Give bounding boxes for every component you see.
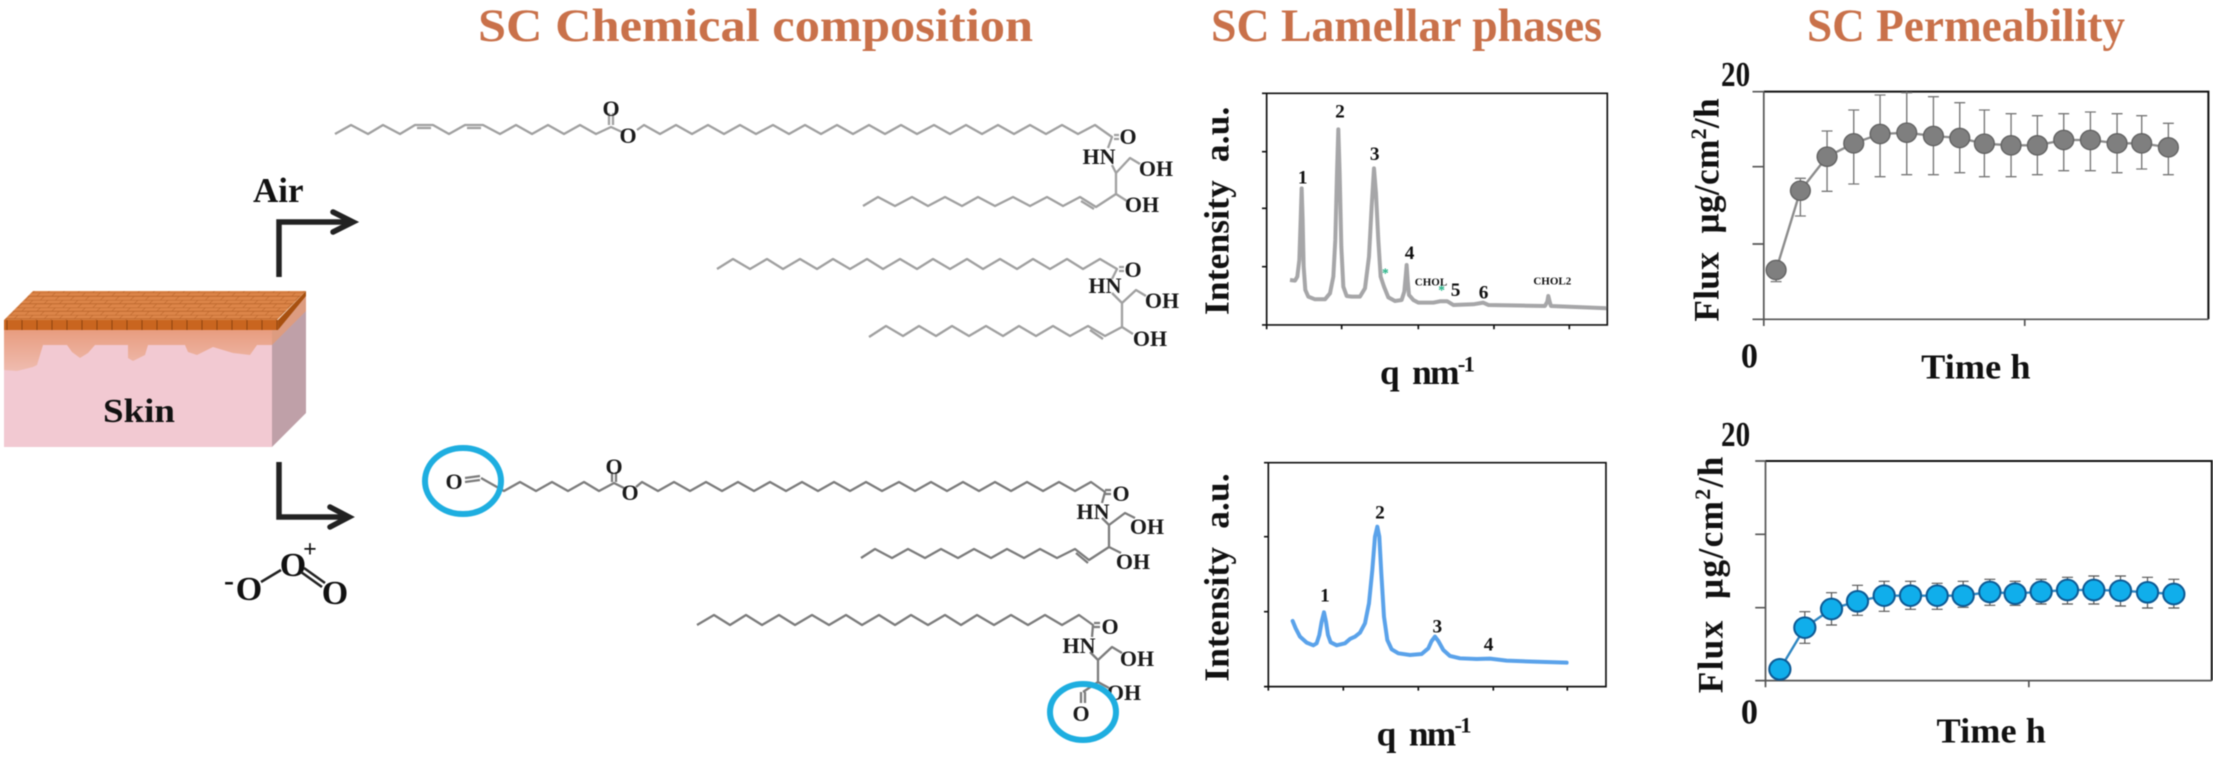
molecule: ozone oxidised ceramide: OH: [1107, 680, 1141, 705]
peak labels: 3: [1432, 616, 1442, 637]
molecule: air ester ceramide EOS: HN: [1082, 144, 1116, 169]
chart axes: [1264, 463, 1606, 691]
molecule: ozone oxidised ester ceramide: [425, 448, 1164, 574]
x axis label: Time h: [1921, 347, 2031, 386]
molecule: air ceramide NS: HN: [1088, 273, 1122, 298]
icon: ozone molecule: +: [303, 537, 317, 563]
y axis label: 2: [1686, 128, 1711, 139]
grey diffraction curve: [1290, 129, 1607, 308]
icon: ozone molecule: O: [322, 575, 348, 612]
peak labels: [1320, 502, 1494, 656]
peak labels: 2: [1375, 502, 1385, 523]
peak labels: *: [1438, 283, 1445, 298]
chart: air SAXS intensity: [1198, 93, 1607, 392]
molecule: air ceramide NS: OH: [1145, 288, 1179, 313]
molecule: ozone oxidised ceramide: [697, 614, 1154, 740]
peak labels: 1: [1298, 167, 1307, 188]
peak labels: [1298, 101, 1572, 304]
blue diffraction curve: [1293, 527, 1567, 663]
title: SC Permeability: SC Permeability: [1807, 0, 2125, 52]
icon: ozone molecule: -: [224, 564, 234, 597]
x axis label: q nm: [1377, 714, 1456, 753]
y axis max: 20: [1721, 414, 1750, 454]
x axis label: -1: [1454, 713, 1472, 738]
label: Air: Air: [253, 171, 304, 210]
data line: [1776, 133, 2168, 270]
y axis label: Intensity a.u.: [1198, 473, 1237, 682]
arrow: ozone: [279, 462, 349, 527]
title: SC Chemical composition: SC Chemical composition: [478, 0, 1033, 52]
peak labels: 3: [1370, 144, 1379, 165]
y axis label: /h: [1686, 98, 1726, 129]
x axis label: q nm: [1380, 353, 1460, 392]
callout: aldehyde circle: [425, 448, 501, 514]
molecule: air ceramide NS: OH: [1133, 326, 1167, 351]
molecule: air ester ceramide EOS: O: [1119, 124, 1137, 149]
molecule: ozone oxidised ceramide: OH: [1120, 646, 1154, 671]
peak labels: 4: [1405, 243, 1415, 264]
data line: [1780, 590, 2174, 669]
peak labels: 4: [1484, 635, 1494, 656]
error bars: [1771, 92, 2174, 282]
y axis label: Flux µg/cm: [1686, 140, 1726, 322]
molecule: ozone oxidised ester ceramide: O: [445, 469, 463, 494]
molecule: ozone oxidised ester ceramide: OH: [1116, 549, 1150, 574]
error bars: [1799, 576, 2179, 643]
chart axes: [1755, 461, 2212, 687]
molecule: ozone oxidised ester ceramide: O: [1112, 481, 1130, 506]
y axis zero: 0: [1741, 692, 1758, 731]
molecule: ozone oxidised ceramide: O: [1101, 614, 1119, 639]
molecule: air ester ceramide EOS: O: [602, 96, 620, 121]
icon: skin block: [4, 291, 306, 447]
peak labels: 2: [1335, 101, 1345, 122]
title: SC Lamellar phases: SC Lamellar phases: [1211, 0, 1602, 52]
chart axes: [1753, 92, 2208, 326]
molecule: ozone oxidised ester ceramide: HN: [1076, 499, 1110, 524]
icon: ozone molecule: [224, 537, 348, 612]
icon: ozone molecule: O: [280, 547, 306, 584]
molecule: ozone oxidised ester ceramide: O: [605, 454, 623, 479]
molecule: ozone oxidised ceramide: O: [1072, 701, 1090, 726]
molecule: ozone oxidised ester ceramide: OH: [1130, 514, 1164, 539]
molecule: air ester ceramide EOS: O: [619, 123, 637, 148]
x axis label: -1: [1458, 351, 1475, 376]
chart: air permeability flux: [1686, 54, 2208, 386]
chart: ozone permeability flux: [1690, 414, 2212, 750]
arrow: air: [279, 212, 353, 277]
peak labels: 1: [1320, 586, 1330, 607]
x axis label: Time h: [1937, 711, 2046, 750]
icon: ozone molecule: O: [236, 571, 262, 608]
y axis max: 20: [1721, 54, 1750, 94]
label: Skin: Skin: [103, 393, 175, 430]
y axis label: Intensity a.u.: [1198, 107, 1237, 315]
molecule: ozone oxidised ester ceramide: O: [621, 480, 639, 505]
molecule: air ester ceramide EOS: OH: [1125, 192, 1159, 217]
data points: [1766, 123, 2178, 280]
peak labels: 6: [1479, 283, 1489, 304]
chart: ozone SAXS intensity: [1198, 463, 1606, 753]
molecule: air ester ceramide EOS: [335, 96, 1173, 217]
y axis label: /h: [1690, 457, 1731, 488]
y axis label: 2: [1690, 489, 1715, 500]
molecule: air ceramide NS: [717, 257, 1179, 351]
data points: [1769, 580, 2184, 680]
peak labels: 5: [1451, 280, 1460, 301]
molecule: air ester ceramide EOS: OH: [1139, 156, 1173, 181]
chart axes: [1262, 93, 1607, 329]
y axis label: Flux µg/cm: [1690, 501, 1731, 693]
callout: aldehyde circle: [1050, 684, 1116, 740]
peak labels: CHOL: [1415, 276, 1447, 288]
peak labels: CHOL2: [1533, 276, 1572, 288]
y axis zero: 0: [1741, 336, 1758, 376]
peak labels: *: [1382, 265, 1389, 280]
molecule: ozone oxidised ceramide: HN: [1062, 633, 1096, 658]
molecule: air ceramide NS: O: [1124, 257, 1142, 282]
